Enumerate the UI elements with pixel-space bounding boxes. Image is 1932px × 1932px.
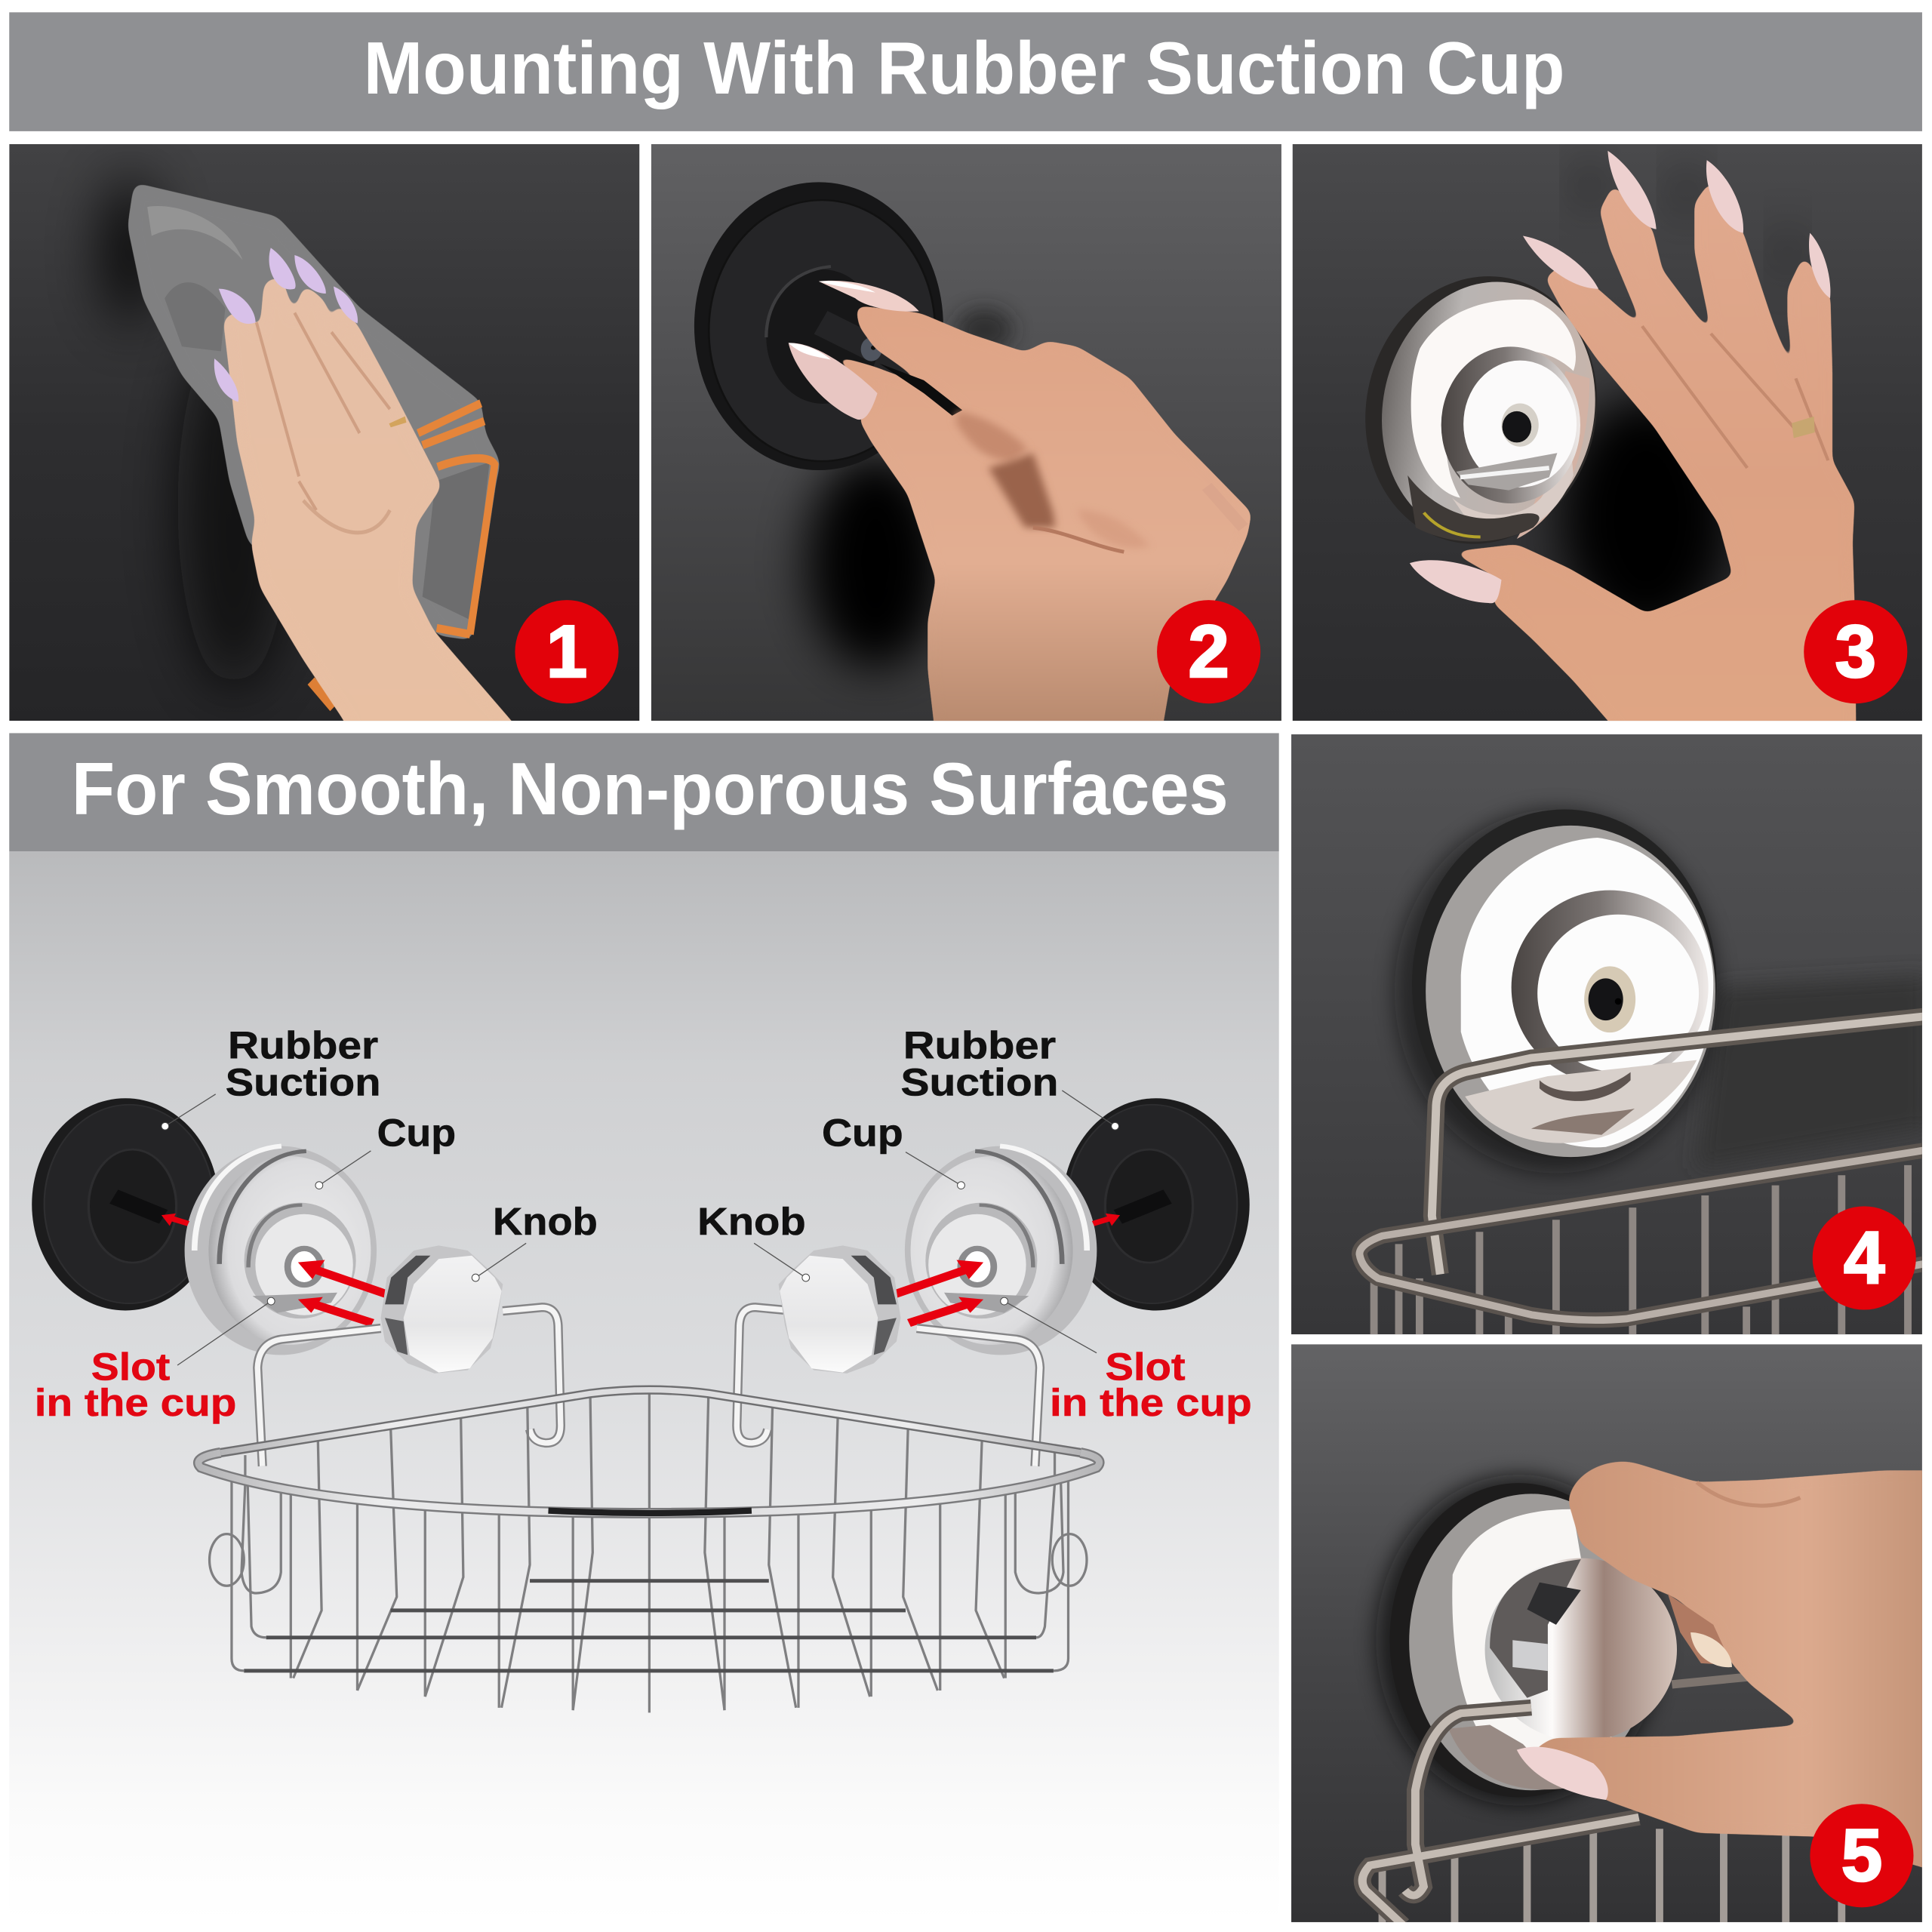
badge: step 2 [1157, 600, 1260, 703]
label: Slot in the cup left [35, 1297, 275, 1424]
hand [214, 248, 512, 721]
basket wires [1359, 1149, 1932, 1339]
panel: step 2 placing rubber suction on the wall [651, 144, 1281, 774]
chrome cup [1365, 276, 1597, 543]
wire basket [198, 1390, 1100, 1712]
label: Knob left: Knob [493, 1200, 598, 1243]
label: Knob right: Knob [697, 1200, 806, 1243]
label: Rubber Suction left: Suction [226, 1060, 380, 1103]
label: Slot in the cup right: in the cup [1050, 1381, 1252, 1424]
hand [1517, 1462, 1932, 1887]
label: Rubber Suction right: Rubber [903, 1023, 1056, 1066]
label: Cup right [822, 1111, 964, 1189]
knob [1485, 1558, 1677, 1741]
right suction disc and cup with arrows [894, 1098, 1250, 1355]
badge: step 5: 5 [1841, 1814, 1882, 1897]
left hanging arm [257, 1307, 561, 1466]
label: Rubber Suction right: Suction [900, 1060, 1058, 1103]
header: For Smooth, Non-porous Surfaces: For Smooth, Non-porous Surfaces [72, 747, 1229, 830]
header: For Smooth, Non-porous Surfaces [9, 733, 1279, 851]
left suction disc and cup with arrows [32, 1098, 387, 1355]
badge: step 1 [515, 600, 619, 703]
label: Cup right: Cup [822, 1111, 903, 1154]
label: Slot in the cup right [1001, 1297, 1252, 1424]
badge: step 3 [1804, 600, 1907, 703]
badge: step 4: 4 [1844, 1216, 1884, 1299]
label: Rubber Suction left [162, 1023, 380, 1130]
right hanging arm [737, 1307, 1040, 1466]
hand [1410, 151, 1857, 774]
panel: diagram on smooth non-porous surfaces [9, 733, 1279, 1922]
panel: step 5 tightening the knob [1291, 1344, 1932, 1932]
label: Slot in the cup left: in the cup [35, 1381, 236, 1424]
panel: step 3 screwing the cup onto the suction [1293, 144, 1922, 774]
rubber disc [694, 182, 943, 470]
basket rail [1362, 1708, 1841, 1932]
label: Slot in the cup left: Slot [91, 1346, 170, 1389]
label: Rubber Suction left: Rubber [228, 1023, 378, 1066]
chrome cup [1412, 809, 1717, 1158]
badge: step 2: 2 [1188, 610, 1229, 693]
header: Mounting With Rubber Suction Cup: Mounting With Rubber Suction Cup [364, 26, 1564, 109]
label: Cup left: Cup [377, 1111, 456, 1154]
badge: step 3: 3 [1835, 610, 1876, 693]
panel: step 4 hanging the basket on the cup [1291, 734, 1932, 1339]
badge: step 1: 1 [546, 610, 587, 693]
label: Cup left [315, 1111, 456, 1189]
right knob [779, 1245, 900, 1374]
upper rail [1432, 1016, 1932, 1275]
label: Knob left [472, 1200, 598, 1281]
label: Slot in the cup right: Slot [1105, 1346, 1186, 1389]
cloth [128, 183, 500, 707]
chrome cup [1390, 1483, 1631, 1790]
panel: step 1 wiping the wall with a cloth [9, 144, 639, 780]
badge: step 5 [1810, 1804, 1914, 1907]
header: Mounting With Rubber Suction Cup [9, 12, 1922, 131]
badge: step 4 [1813, 1206, 1916, 1310]
left knob [381, 1245, 503, 1374]
label: Knob right [697, 1200, 810, 1281]
hand [788, 281, 1251, 721]
label: Rubber Suction right [900, 1023, 1118, 1130]
